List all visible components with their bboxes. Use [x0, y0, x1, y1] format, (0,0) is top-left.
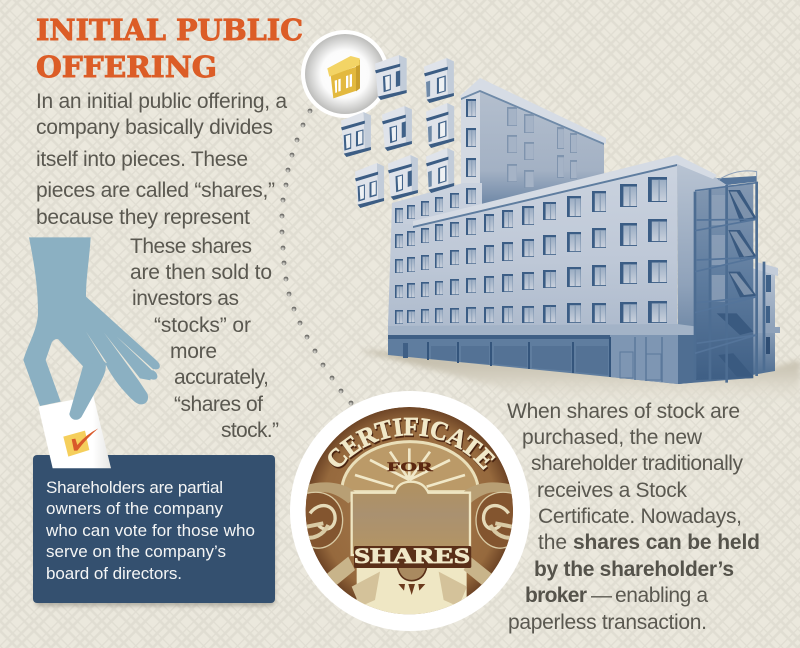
windows [395, 177, 667, 324]
stocks text block: These shares [130, 235, 252, 258]
intro text block [36, 90, 287, 229]
title: OFFERING [36, 50, 217, 84]
certificate medallion [290, 391, 530, 631]
icon: hand holding ballot [23, 237, 160, 468]
side wall [677, 163, 752, 384]
main facade [388, 163, 677, 327]
certificate text block: When shares of stock are [507, 400, 740, 423]
plaque [352, 482, 470, 555]
dotted connector arc [280, 109, 353, 405]
title [36, 13, 303, 84]
certificate text block: enabling a [615, 584, 708, 607]
tower block [460, 78, 606, 205]
plaque lower bump [397, 567, 427, 581]
roof [413, 155, 717, 226]
certificate medallion: SHARES [354, 543, 470, 568]
stocks text block: investors as [132, 287, 239, 310]
certificate text block: shares can be held [573, 531, 760, 554]
title: INITIAL PUBLIC [36, 13, 303, 47]
intro text block: In an initial public offering, a [36, 90, 287, 113]
stocks text block: more [170, 340, 217, 363]
check box [63, 431, 89, 457]
callout box: shareholders: owners of the company [46, 499, 224, 518]
callout box: shareholders: serve on the company’s [46, 542, 226, 561]
intro text block: because they represent [36, 206, 250, 229]
stocks text block: accurately, [174, 366, 269, 389]
certificate text block: Certificate. Nowadays, [538, 505, 742, 528]
intro text block: company basically divides [36, 116, 273, 139]
right wing [752, 262, 780, 375]
certificate text block: broker [525, 584, 587, 607]
certificate medallion: CERTIFICATE [328, 418, 496, 472]
certificate text block: by the shareholder’s [534, 558, 734, 581]
certificate text block: receives a Stock [537, 479, 688, 502]
FOR: FOR [387, 460, 434, 474]
certificate text block [507, 400, 760, 634]
stocks text block: “stocks” or [154, 314, 251, 337]
left section [388, 183, 482, 327]
certificate text block: — [591, 584, 612, 607]
check mark [72, 428, 98, 451]
stocks text block [130, 235, 279, 442]
icon: gold window badge [301, 30, 389, 118]
stocks text block: are then sold to [130, 261, 272, 284]
fire escape [695, 171, 764, 383]
CERTIFICATE arc text [337, 435, 484, 471]
certificate text block: the [538, 531, 567, 554]
finger gaps [86, 332, 154, 394]
SHARES banner [354, 546, 471, 568]
ballot card [38, 396, 111, 468]
callout box: shareholders: who can vote for those who [45, 521, 255, 540]
bottom cream panel [357, 567, 467, 617]
scrolls [300, 482, 380, 607]
intro text block: pieces are called “shares,” [36, 179, 275, 202]
building illustration [358, 78, 800, 408]
callout box: shareholders: board of directors. [46, 564, 182, 583]
floating window blocks [341, 55, 454, 208]
certificate text block: shareholder traditionally [531, 452, 744, 475]
index finger [69, 362, 106, 420]
stocks text block: “shares of [174, 393, 263, 416]
ground shadow [358, 350, 800, 408]
stocks text block: stock.” [221, 419, 279, 442]
cornice [388, 324, 700, 335]
certificate text block: paperless transaction. [508, 611, 707, 634]
callout box: shareholders: Shareholders are partial [46, 478, 223, 497]
ground floor [388, 333, 717, 384]
certificate text block: purchased, the new [522, 426, 703, 449]
intro text block: itself into pieces. These [36, 148, 248, 171]
callout box: shareholders [33, 455, 275, 606]
hand [23, 237, 160, 406]
sunburst [342, 442, 478, 492]
